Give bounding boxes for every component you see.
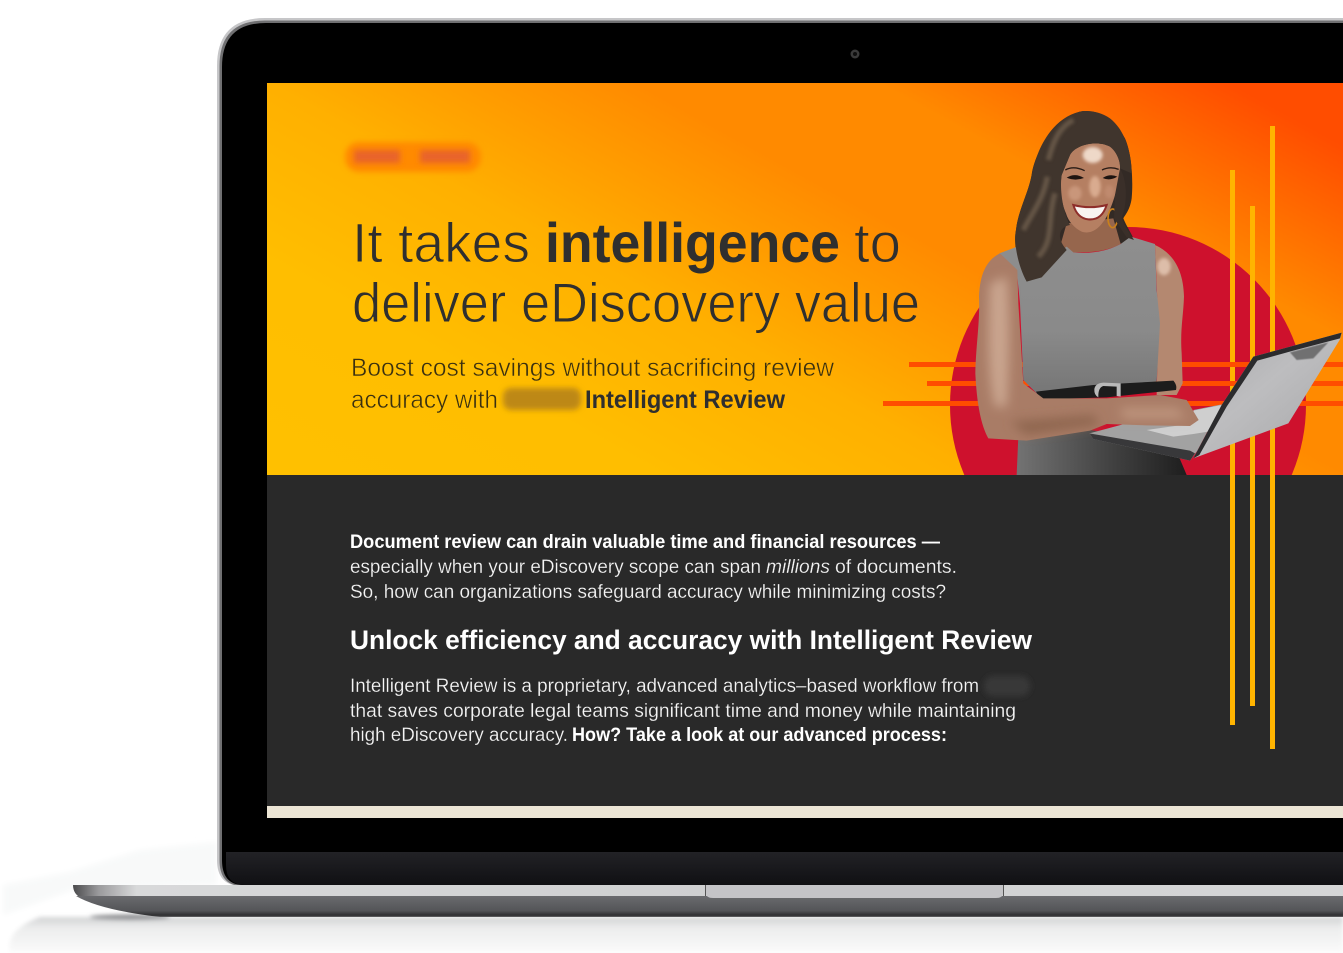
grey dress xyxy=(999,237,1160,393)
subtitle: Intelligent Review xyxy=(585,386,786,414)
description paragraph: Intelligent Review is a proprietary, advanced analytics–based workflow from xyxy=(350,676,979,697)
laptop lid frame xyxy=(217,18,1343,886)
arm shading xyxy=(989,277,1187,435)
intro paragraph: especially when your eDiscovery scope can span xyxy=(350,557,761,578)
eyes xyxy=(1067,175,1117,180)
description paragraph: high eDiscovery accuracy. xyxy=(350,725,568,746)
blurred company name xyxy=(984,676,1030,696)
chin of the bezel xyxy=(226,852,1343,885)
photo: woman holding a laptop xyxy=(975,111,1342,475)
skirt xyxy=(1017,430,1187,475)
desk shadow xyxy=(3,842,1343,953)
description paragraph: How? Take a look at our advanced process: xyxy=(572,725,947,746)
vertical accent lines xyxy=(1230,126,1275,749)
screen: hero panel xyxy=(267,83,1343,475)
earring xyxy=(1108,209,1117,228)
face highlights xyxy=(1068,147,1114,201)
eyebrows xyxy=(1065,168,1119,171)
blurred company name xyxy=(503,388,581,410)
title: deliver eDiscovery value xyxy=(352,271,920,334)
title: It takes xyxy=(352,211,530,274)
hair front xyxy=(1015,111,1132,282)
hinge notch xyxy=(706,885,1003,898)
red circle xyxy=(950,227,1306,475)
title: to xyxy=(854,211,901,274)
title xyxy=(352,211,920,334)
intro paragraph: of documents. xyxy=(835,557,957,578)
subtitle: Boost cost savings without sacrificing review xyxy=(351,354,835,382)
intro paragraph: Document review can drain valuable time and financial resources — xyxy=(350,532,940,553)
webcam xyxy=(850,50,860,58)
hair back xyxy=(1015,111,1133,248)
subtitle: accuracy with xyxy=(351,386,498,414)
laptop base held by woman xyxy=(1089,404,1222,461)
title: intelligence xyxy=(545,211,840,274)
smile xyxy=(1073,205,1107,219)
subtitle xyxy=(351,354,835,414)
blurred logo pill xyxy=(345,142,481,172)
intro paragraph xyxy=(350,532,957,603)
belt xyxy=(1036,381,1176,399)
laptop base xyxy=(73,885,1343,917)
arm on the right xyxy=(1155,245,1184,395)
horizontal accent lines xyxy=(883,362,1343,406)
base lip xyxy=(73,885,1343,896)
screen: dark content panel xyxy=(267,475,1343,806)
arm on the left and hand xyxy=(975,253,1199,441)
face xyxy=(1061,143,1120,232)
laptop lid xyxy=(1193,333,1342,458)
intro paragraph: millions xyxy=(766,557,830,578)
neck xyxy=(1060,218,1121,252)
section heading: Unlock efficiency and accuracy with Intelligent Review xyxy=(350,625,1033,655)
description paragraph xyxy=(350,676,1030,746)
intro paragraph: So, how can organizations safeguard accuracy while minimizing costs? xyxy=(350,582,946,603)
description paragraph: that saves corporate legal teams significant time and money while maintaining xyxy=(350,701,1016,722)
base underside xyxy=(76,896,1343,917)
hair highlights xyxy=(1023,120,1073,257)
screen: cream footer strip xyxy=(267,806,1343,818)
